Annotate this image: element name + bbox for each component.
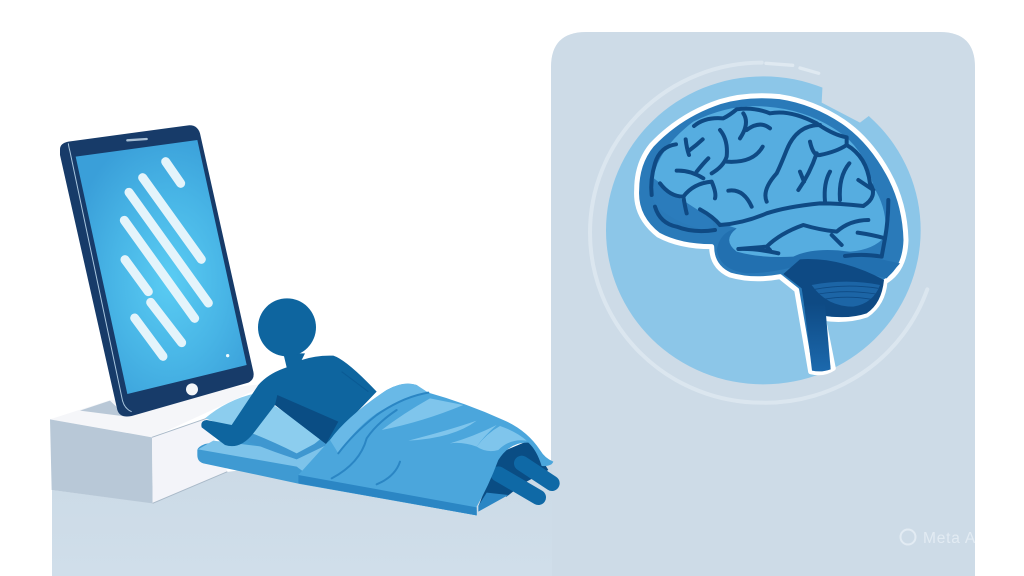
- dashed ring: [590, 63, 927, 403]
- watermark: Meta AI: [923, 530, 981, 547]
- sulci: [651, 109, 888, 257]
- cerebellum: [783, 259, 884, 343]
- screen glare stripes: [124, 162, 208, 356]
- home button: [186, 383, 198, 395]
- light blue circle: [606, 76, 921, 384]
- bedside block: [50, 383, 270, 503]
- blanket interior: [478, 440, 548, 507]
- cerebrum light lobes: [653, 106, 886, 257]
- lower dark lobe: [717, 228, 900, 278]
- legs under blanket: [498, 463, 552, 497]
- background panel: [551, 32, 975, 576]
- tablet body: [60, 125, 254, 417]
- blanket: [298, 384, 553, 515]
- head: [258, 298, 316, 356]
- floor: [52, 462, 552, 576]
- brain stem: [804, 303, 831, 371]
- person body and arm: [201, 353, 377, 446]
- tablet: [60, 125, 254, 417]
- blanket folds: [330, 384, 428, 453]
- circle notch: [822, 70, 890, 123]
- person in bed: [197, 298, 553, 515]
- pillow: [205, 393, 323, 458]
- brain illustration: [590, 63, 927, 403]
- tablet screen: [76, 140, 247, 394]
- mattress: [197, 427, 477, 515]
- brain silhouette: [637, 96, 906, 373]
